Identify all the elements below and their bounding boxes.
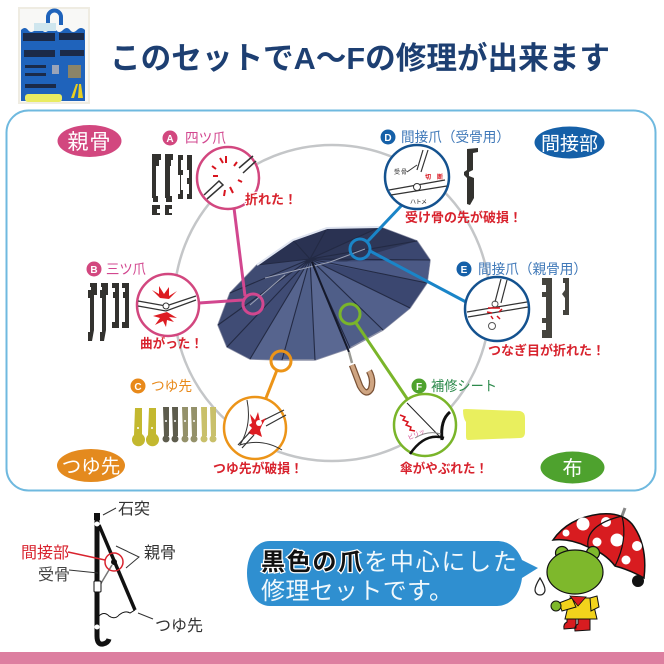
parts: three claws (88, 283, 129, 341)
label B: 三ツ爪 (106, 261, 146, 277)
label D: 間接爪（受骨用） (401, 129, 510, 145)
bubble text line 2: 修理セットです。 (261, 578, 453, 605)
part: parent rib claws (542, 278, 569, 338)
magnifier A (197, 147, 259, 209)
connector F green line and ring (340, 304, 408, 400)
section B: 三ツ爪 (86, 261, 203, 351)
label 間接部: 間接部 (21, 544, 69, 562)
section C: つゆ先 (130, 378, 303, 476)
category pill: 布: 布 (562, 457, 582, 480)
label F: 補修シート (431, 378, 497, 394)
caption C: つゆ先が破損！ (213, 461, 303, 476)
magnifier B (137, 274, 199, 336)
umbrella shaft (312, 262, 349, 352)
umbrella handle (352, 365, 372, 392)
label A (162, 130, 226, 146)
repair sheet (463, 409, 525, 440)
label A: A (166, 134, 174, 145)
label F: F (416, 382, 422, 393)
frog head (547, 546, 603, 594)
umbrella side view (94, 513, 135, 644)
category pill: つゆ先: つゆ先 (62, 456, 120, 478)
part: single joint claw (464, 148, 478, 205)
label C: C (134, 382, 142, 393)
caption E: つなぎ目が折れた！ (488, 343, 605, 358)
bottom rib anatomy diagram (21, 500, 203, 644)
magnifier D (385, 145, 449, 209)
category pill: 親骨: 親骨 (68, 131, 112, 154)
title: このセットでA〜Fの修理が出来ます (110, 41, 610, 76)
connector D / E blue lines and ring (350, 205, 466, 302)
label A: 四ツ爪 (185, 130, 226, 146)
scarf (570, 596, 586, 606)
mascot umbrella (553, 508, 645, 587)
speech bubble (247, 541, 538, 606)
frog arms (559, 598, 576, 611)
red joint circle (105, 553, 123, 571)
section F: 補修シート (394, 378, 525, 476)
product package photo (18, 7, 90, 104)
label D: D (384, 133, 392, 144)
magnifier C (224, 397, 286, 459)
magnifier D: 切断 (425, 173, 443, 181)
label B: B (90, 265, 98, 276)
section E: 間接爪（親骨用） (456, 261, 605, 358)
magnifier E (465, 277, 529, 341)
label C (130, 378, 192, 394)
label 石突: 石突 (118, 500, 150, 518)
label C: つゆ先 (151, 378, 192, 394)
label E: 間接爪（親骨用） (478, 261, 587, 277)
umbrella photo (218, 227, 430, 392)
frog hand (551, 601, 561, 611)
caption D: 受け骨の先が破損！ (405, 210, 522, 225)
magnifier F: ビリッ (406, 427, 426, 442)
frog mascot with umbrella (535, 508, 645, 631)
parts: four claws (152, 154, 192, 215)
caption A: 折れた！ (245, 192, 297, 207)
category pill: 間接部 (534, 126, 604, 158)
caption F: 傘がやぶれた！ (400, 461, 488, 476)
panel: repair diagram (6, 110, 656, 490)
water drop (535, 578, 545, 595)
label B (86, 261, 146, 277)
bubble text line 1: 黒色の爪を中心にした (261, 549, 517, 576)
category pill: 布 (540, 452, 604, 484)
label つゆ先: つゆ先 (155, 617, 203, 635)
frog body (565, 598, 597, 619)
category pill: 親骨 (58, 125, 122, 157)
magnifier D: 受骨 (394, 168, 407, 176)
bottom pink band (0, 652, 664, 664)
section A: 四ツ爪 (152, 130, 297, 215)
connector C orange line and ring (266, 351, 291, 398)
large gray guide circle (174, 145, 490, 461)
label 親骨: 親骨 (144, 544, 176, 562)
magnifier D: ハトメ (410, 200, 427, 206)
section D: 間接爪（受骨用） (380, 129, 522, 225)
category pill: つゆ先 (57, 449, 125, 482)
category pill: 間接部: 間接部 (541, 133, 598, 155)
connector A / B pink lines and ring (199, 208, 263, 314)
caption B: 曲がった！ (140, 336, 203, 351)
parts: yellow and metal tips (132, 407, 217, 446)
leader lines (68, 508, 153, 619)
frog boots (564, 616, 590, 631)
label E: E (461, 265, 468, 276)
label 受骨: 受骨 (38, 566, 70, 584)
